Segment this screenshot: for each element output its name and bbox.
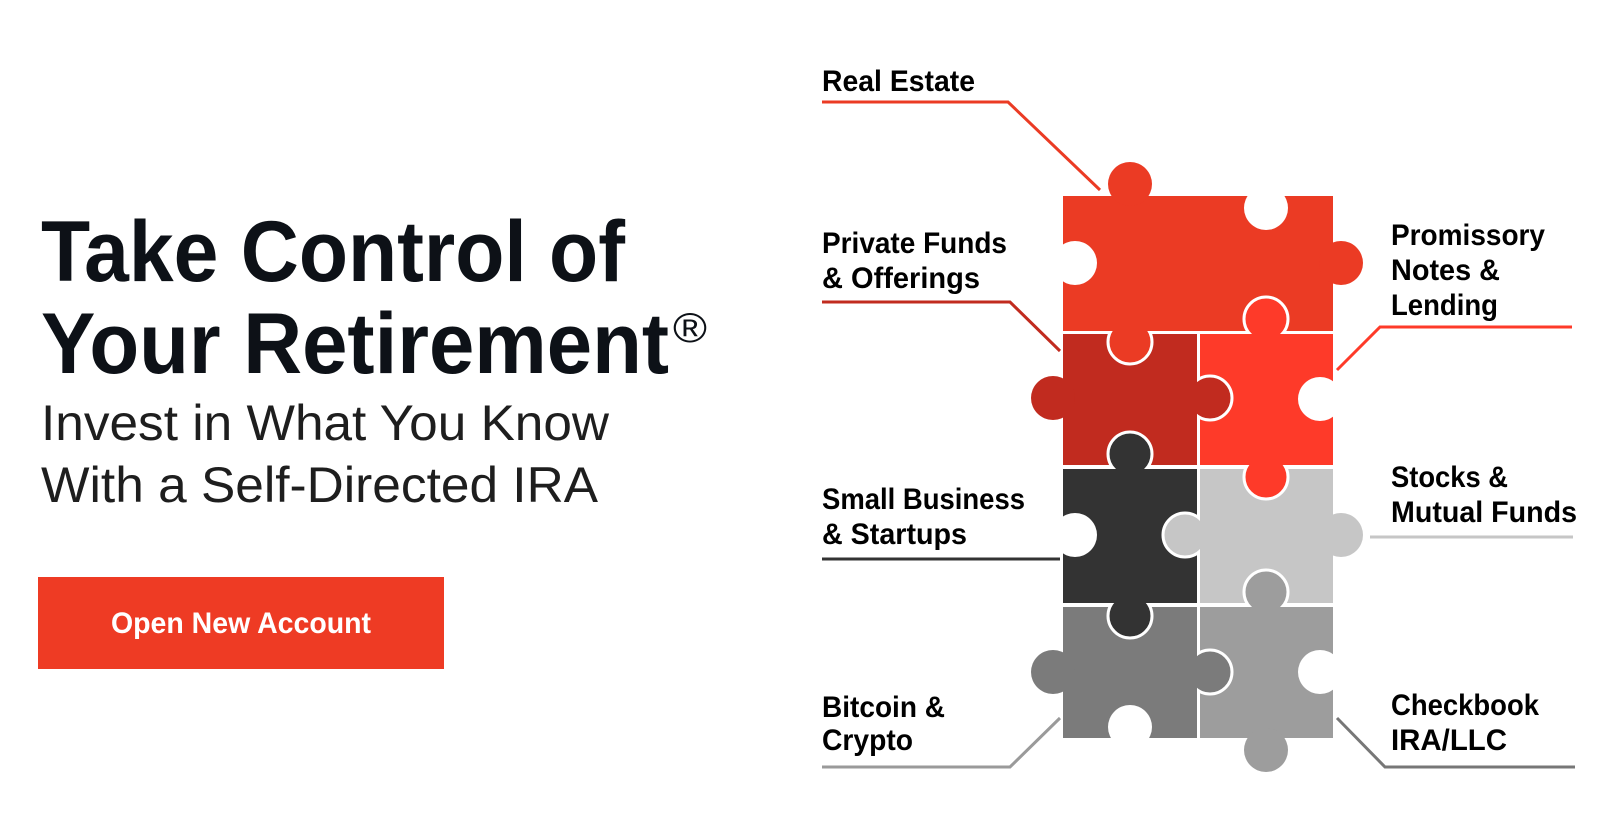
label: small business: Small Business [822,483,1025,516]
label: bitcoin: Crypto [822,724,913,757]
label: promissory notes [1337,219,1572,370]
label: stocks: Mutual Funds [1391,496,1577,529]
label: checkbook [1337,689,1575,767]
puzzle graphic [1031,162,1363,772]
button: open new account [38,577,444,669]
label: bitcoin [822,691,1060,767]
label: checkbook: Checkbook [1391,689,1539,722]
label: promissory notes: Promissory [1391,219,1545,252]
label: real estate [822,65,1100,190]
label: small business: & Startups [822,518,967,551]
subtitle: Invest in What You Know [41,395,610,451]
button: open new account: Open New Account [111,607,371,640]
label: bitcoin: Bitcoin & [822,691,945,724]
label: small business [822,483,1060,559]
label: stocks [1370,461,1577,537]
label: private funds: & Offerings [822,262,980,295]
label: promissory notes: Lending [1391,289,1498,322]
label: private funds: Private Funds [822,227,1007,260]
title: Take Control of [41,204,625,300]
subtitle: With a Self-Directed IRA [41,457,599,513]
label: private funds [822,227,1060,351]
label: real estate: Real Estate [822,65,975,98]
title [41,204,707,392]
label: stocks: Stocks & [1391,461,1508,494]
subtitle [41,395,610,513]
label: promissory notes: Notes & [1391,254,1500,287]
label: checkbook: IRA/LLC [1391,724,1507,757]
title: ® [673,304,707,351]
title: Your Retirement [41,296,669,392]
